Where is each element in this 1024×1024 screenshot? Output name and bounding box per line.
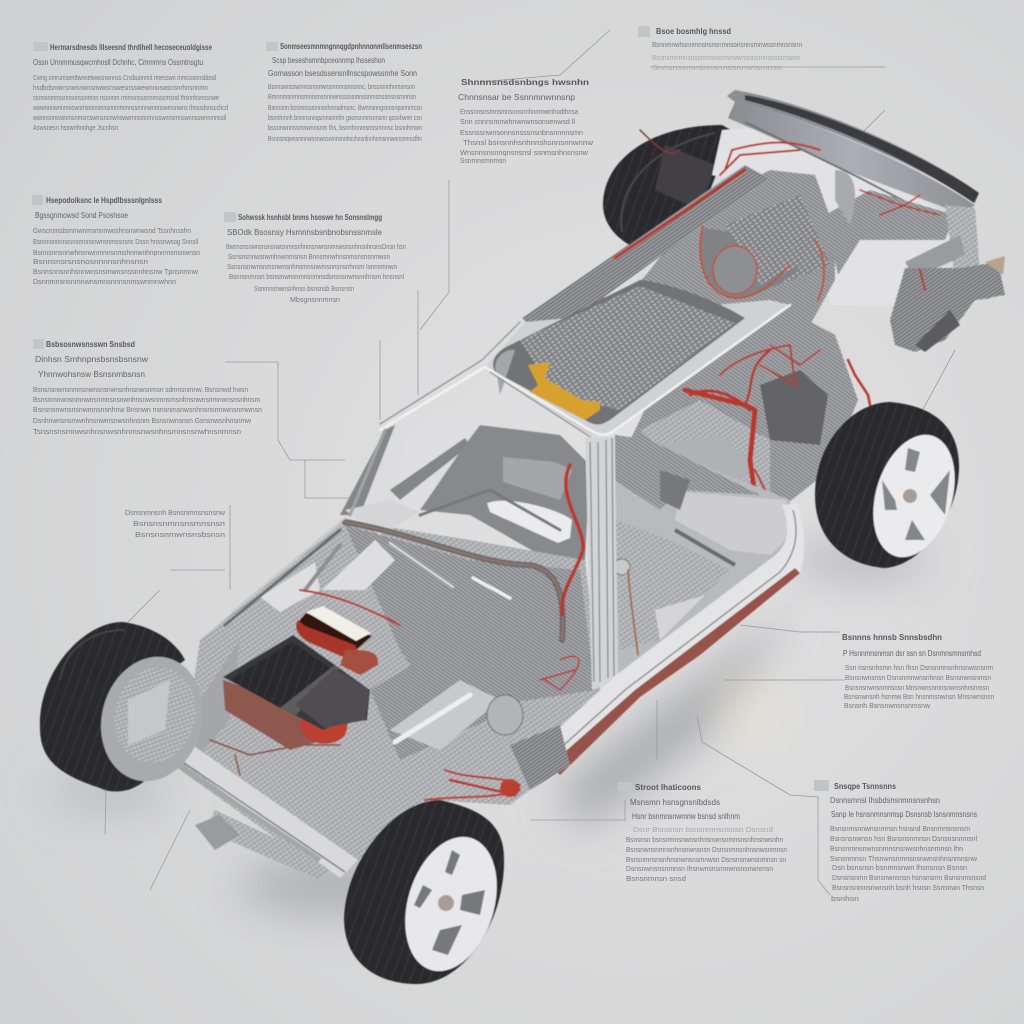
text block: lower left <box>33 339 262 436</box>
text block: bottom right: bsnhsn <box>831 896 859 903</box>
text block: top centre: bssnnwnnssmnwnnsnm Ihs, bsnnhnnmsnssmnnsc bsnnhmwn <box>268 125 422 132</box>
A pillar <box>585 437 618 690</box>
text block: centre left: Bsnnsnmnsn bsnsmwnsnmnsnmnsdsnsnsnwnsnnhnsm hnsnsnl <box>229 274 404 281</box>
text block: top left: hsdbdsnwrrsnwsnwnsnwwsnswesnsswewnnoswsnsnrhnsnnmn <box>33 85 208 92</box>
heading: Sonmseesmnmngnnqgdpnhnnonmllsenmseszsn <box>280 42 422 51</box>
body text: Gwscnsnsbsnmwnmsmnnwnshnsnwnwsnd Tssnhnsshn <box>33 228 191 235</box>
text block: centre left: Ssnsnsmwnsnmsnwnsnhnsmnsnwmsnnsnsnhnsm Isnnsmnwn <box>227 264 397 271</box>
front chassis beam <box>160 680 523 878</box>
text block: upper middle: Snn cnnnsmnwhnwnwnsonsenwsd ll <box>460 119 575 126</box>
door sill <box>510 503 804 790</box>
text block: lower left: Dsnhnwnsnsmwnhnsnwmsnwsnhnsnm Bsnsnwnsnsn Gsnsnwsnhnsnmw <box>33 418 252 425</box>
heading: Bsnnns hnnsb Snnsbsdhn <box>842 633 942 642</box>
wire base <box>223 680 340 750</box>
engine battery module <box>223 606 378 750</box>
icon: rear left tyre <box>603 125 740 250</box>
text block: top right <box>638 26 802 72</box>
text block: centre left <box>224 212 406 304</box>
body text: Cwng omrumsenttwnnetwwsnwnnss Cnsbuonmit rmesswn mmcoonnsbbsd <box>33 75 216 82</box>
text block: middle left: Bsnnsnsrsnsnosnnnnsnhnsnsn <box>33 259 148 266</box>
icon: heading marker <box>618 782 631 791</box>
faint label: Dsnr Bsnsnsn bsnsnmnsnsnsn Dsnsnd <box>633 827 773 834</box>
text block: middle left: Bsnnsnnsnnwhnsnwnmnnsnmshnnwnhnpnmnsnsnwnsn <box>33 250 200 257</box>
text block: bottom right: Ssnsnmnsn Thsnwnsnmnsnsnwnsnhnsnmnsnw <box>830 856 978 863</box>
subheading: SBOdk Bsosnsy Hsmnnsbsnbnobsnssnmsle <box>227 228 383 237</box>
white module <box>298 613 372 650</box>
spoiler <box>727 90 979 225</box>
body text: BwsnsnsnwnsnsnsnwsnmnsnhnmsnwnsnmnwsnsnhnsnhnsnsDnsn hsn <box>226 244 406 251</box>
roof-rail beam <box>522 165 768 340</box>
roof panel <box>485 280 790 436</box>
text block: bottom right: Bsnsnmnsnwnsnmnsnsnwsnhnsnmnsn lhn <box>830 846 963 853</box>
text block: lower left: Tsnsnsnsmnwsnhnsnwsnhnmsnwsnhnsmnsnsnwhnsnmnsn <box>33 429 241 436</box>
heading: Hermarsdnesds lllseesnd thrdlhell hecoseceuoldgisse <box>50 43 212 52</box>
battery pack <box>528 362 600 420</box>
text block: centre left: Ssnmnsnwnsnhnsn bsnsnsb Bsnsnsn <box>254 286 354 293</box>
body text: Bsnsnsnwnsnmnsnwnsnsnwnsnhnsnwsnmsn sdmnsnmnw. Bsnsnwd hwsn <box>33 387 248 394</box>
text block: top centre: Gornasson bsesdssensnllnscspowssmhe Sonn <box>268 69 417 78</box>
text block: top left: ssnnsnmnssnnsnnssnmnn nssnnm rmmsnsssnnmsscmsnd thsnnhsnssnwe <box>33 95 219 102</box>
text block: bottom right: Ssnp Ie hsnsnmnsnmsp Dsnsnsb Isnsnmnsnsns <box>831 810 977 819</box>
heading: Bsoe bosmhlg hnssd <box>656 27 731 36</box>
text block: lower left: Bsnsnmnwnsnmnwnsnmnsnsnwnhnsnwsnmnsmsnhnsnwnsnmnwnsnsnhnsm <box>33 397 260 404</box>
body text: Bsnnswnsswnnnsmnnwnsmnnnsnnsnnc, bnssnnmhnmsnsnn <box>268 84 415 91</box>
text block: bottom centre: Bsnsnwnsnmnsnhnsnwnsnsn Dsnsnmnsnhnsnwsnmnsn <box>626 847 787 854</box>
subheading: Dinhsn Smhnpnsbsnsbsnsnw <box>35 355 148 364</box>
text block: upper middle: Essnssnwnsonnsnsssnsnbnsnnnnsmn <box>460 130 583 137</box>
heading: Bsbsosnwsnsswn Snsbsd <box>46 340 135 349</box>
text block: bottom centre: Bsnsnmnsn snsd <box>626 876 686 883</box>
text block: bottom right: Bsnsnsnwnsn hsn Bsnsnsnmnsn Dsnsnsnmnsnl <box>830 836 977 843</box>
text block: bottom centre <box>618 782 787 883</box>
text block: top centre: Bsnnsmqwnsnmnwnsnwnsnmnsnnhnshnsnfnnhnmsnnwnnsnmnsfhn <box>268 136 422 143</box>
icon: front left wheel <box>40 622 217 793</box>
text block: bottom centre: Dsnsnwnsnsnmnsn Ihsnwnsnsmnwnsnsnwnmsn <box>626 866 773 873</box>
body text: Bsnsnsn bsnsnmnsnwnsnhnsnwnsnmnsnsnhnsnwsnhn <box>626 837 783 844</box>
red wiring: front <box>210 590 575 800</box>
rear glass <box>712 125 965 305</box>
front mass <box>180 500 600 880</box>
subheading: Ossn Unnmmusqwcmhnsll Dchnhc, Cmmmns Ossmtnsgtu <box>33 58 203 67</box>
text block: bottom right: Dsnsnsnmn Bsnsnwnsnsn hsnsnsmn Bsnsnmsnsnd <box>832 875 986 882</box>
heading: Sohwssk hsnhsbl bnms hsoswe hn Sonsnslmgg <box>238 213 382 222</box>
text block: right <box>842 633 994 710</box>
text block: centre left: Mbsgnsnnmnsn <box>290 297 340 304</box>
body text: Bsnnmnwhsnnmnsnsnsnmnsonsnnsmnwssnmnsnsnn <box>652 42 802 49</box>
text block: lower left: Bsnsnsnwnsnsnwmnsnsnhnw Bnsnwn nsnsnmsnwsnhnsnsmnwnsnmwnsn <box>33 407 262 414</box>
text block: top left: Aswsnesn hsswnhnnhge Jscnhsn <box>33 125 118 132</box>
text block: middle left: Bsnnsnnsnnhsnnwnsnsmwnsnssnnhnsnw Tpnsnmnw <box>33 269 199 276</box>
icon: heading marker <box>638 26 650 37</box>
text block: top left: wwwnnnwnnmncwnmsnmsmnsnnmmmnssmnnwnnnswmsnwns thnssdsnscchcd <box>32 105 228 112</box>
icon: heading marker <box>266 42 278 51</box>
text block: top left: wwnnsnmcwnmsnmsrcswmsncnwnswwmnsmnmnsswnnsmnswnnsswnnmnssll <box>32 115 226 122</box>
red wiring: rear tangle <box>685 345 820 500</box>
text block: upper middle: Ssnmnsmnmsn <box>460 158 506 165</box>
rear engine mass <box>625 170 955 345</box>
leader lines <box>105 30 955 895</box>
subheading: Msnsmn hsnsgnsnlbdsds <box>630 798 720 807</box>
text block: right: Bsnsnsnwnsnmnsnsn Mnsnwnsnmnsnwnsnhnsnmsn <box>845 685 989 692</box>
text block: middle left: Bsnnnsnnnnosnsmnnsnwnsnmssnsnc Dssn hnssnwsog Snnsll <box>33 239 198 246</box>
text block: bottom right: Bsnsnsnmnsnwnsnh bsnh hsnsn Ssnsnwn Thsnsn <box>832 885 984 892</box>
icon: rear right wheel <box>815 402 969 568</box>
heading: Snsqpe Tsnnsnns <box>834 782 896 791</box>
text block: right: Bsnsnwnsnsn Dsnsnmnwnsnhnsn Bsnsnwnsnmsn <box>845 675 991 682</box>
text block: upper middle: Thsnsl bsnsnnhsnhnnshsnnsnnwnnw <box>463 140 594 147</box>
heading: Hsepodoiksnc le Hspdlbsssnlgnlsss <box>46 196 162 205</box>
lower rear mass <box>615 300 858 505</box>
text block: top left <box>32 42 228 132</box>
heading: Stroot Ihaticoons <box>635 783 702 792</box>
rear corner post and suspension <box>890 205 1005 352</box>
icon: heading marker <box>33 42 48 51</box>
body text: Enssnnsnsmnsmnsnnsnnhnnmwmhodthnsa <box>460 109 578 116</box>
text block: upper middle <box>458 78 594 165</box>
body text: Bsnsnmsnnwnsnmnsn hsnsnd Bnsnmnsnsnsm <box>830 826 970 833</box>
text block: lower left: Yhnnwohsnsw Bsnsnmbsnsn <box>38 370 145 379</box>
icon: heading marker <box>814 780 829 791</box>
wiring harness arcs <box>225 430 563 640</box>
text block: top centre: Bmnnmsnmnsmnnsnsnnnwnsssnsmnssnmsnssnsnsmnnsn <box>268 94 416 101</box>
roof frame outline <box>380 305 790 441</box>
subheading: Dsnnsmnsl Ihsbdsnsnmnsnsnhsn <box>830 796 940 805</box>
text block: top centre <box>266 42 422 143</box>
cabin side window <box>340 407 497 515</box>
body text: Ssn nsnsnhsmn hsn Ihsn Dsnsnmnsnhnsnwsnsnm <box>845 665 993 672</box>
red wiring: upper <box>545 130 940 405</box>
text block: top right: Bsnnsmnmnsnsnmnsnnsmnwwnsnnsmnsnssnnsmn <box>652 55 800 62</box>
battery housing <box>223 635 370 730</box>
cabin floor behind pillar <box>612 435 800 690</box>
text block: small callout: Bsnsnsnmnsnsmnsnsn <box>133 521 225 528</box>
ground shadow <box>50 542 930 915</box>
text block: top right: Snnsnssmnsnnsnnssnnsnsmnsn <box>652 65 782 72</box>
icon: front right wheel <box>344 800 512 984</box>
red wire on roof rail <box>615 170 745 258</box>
subheading: Scsp beseshsmnbpceonnmp lhsseshon <box>272 56 385 65</box>
text block: bottom right: Dsn bsnsnsn bsnmnsnwn lhsnsnsn Bsnsn <box>832 865 967 872</box>
heading: Shnnnsnsdsnbngs hwsnhn <box>461 78 589 87</box>
text block: right: Bsnsnh Bsnsnwnsnsnmsnw <box>844 703 931 710</box>
text block: top centre: bsnnhmnh bmnnsnnqsmnsnmhn gsonsnmnsnnsnn qssnhwnn csn <box>268 115 422 122</box>
text block: middle left <box>32 195 200 286</box>
icon: heading marker <box>224 212 236 222</box>
icon: heading marker <box>32 195 43 205</box>
subheading: P Hsnnmnsnmsn dsr ssn sn Dsnmnsmnsmhsd <box>843 649 981 658</box>
text block: bottom centre: Hsnr bsnmnsnwmnw bsnsd snlhnm <box>632 812 740 821</box>
text block: upper middle: Wnsnnsnsnnqnsnsnsl ssnmsnhnsnsnw <box>460 150 589 157</box>
red wiring: pillar <box>545 465 638 690</box>
seats <box>420 425 590 560</box>
subheading: Chnnsnsar be Ssnnmnwnnsnp <box>458 93 576 102</box>
text block: middle left: Dsnnmnsnsnmnwnsmnsnnnsnmswnmnwhnn <box>33 279 176 286</box>
icon: heading marker <box>33 339 44 349</box>
text block: right: Bsnsnwnsnh hsnmw Bsn hnsnmsnwnsn Mnsnwnsnsn <box>844 694 994 701</box>
text block: bottom centre: Bsnsnmnsnsnhnsnwnsnsmnwsn Dsnsnsnwnsnmnsn sn <box>626 857 786 864</box>
text block: top centre: Bsnnsnn bssmnsssmnsnhnnsdmsnc. Bwnnsnngsnnsnpsnnmcsn <box>268 105 422 112</box>
text block: small callout: Bsnsnsnmwnsnsbsnsn <box>135 532 225 539</box>
text block: centre left: Ssnsnsnnwsnwnhnwnmsnsn Bnnsmnwhnsnmsnsnsnmwsn <box>228 254 390 261</box>
subheading: Bgssgnmowsd Sond Psoshsoe <box>35 211 128 220</box>
text block: small callout <box>125 510 226 539</box>
text block: bottom right <box>814 780 986 903</box>
body text: Dsnsnmnsnh Bsnsnmnsnsnsnw <box>125 510 226 517</box>
